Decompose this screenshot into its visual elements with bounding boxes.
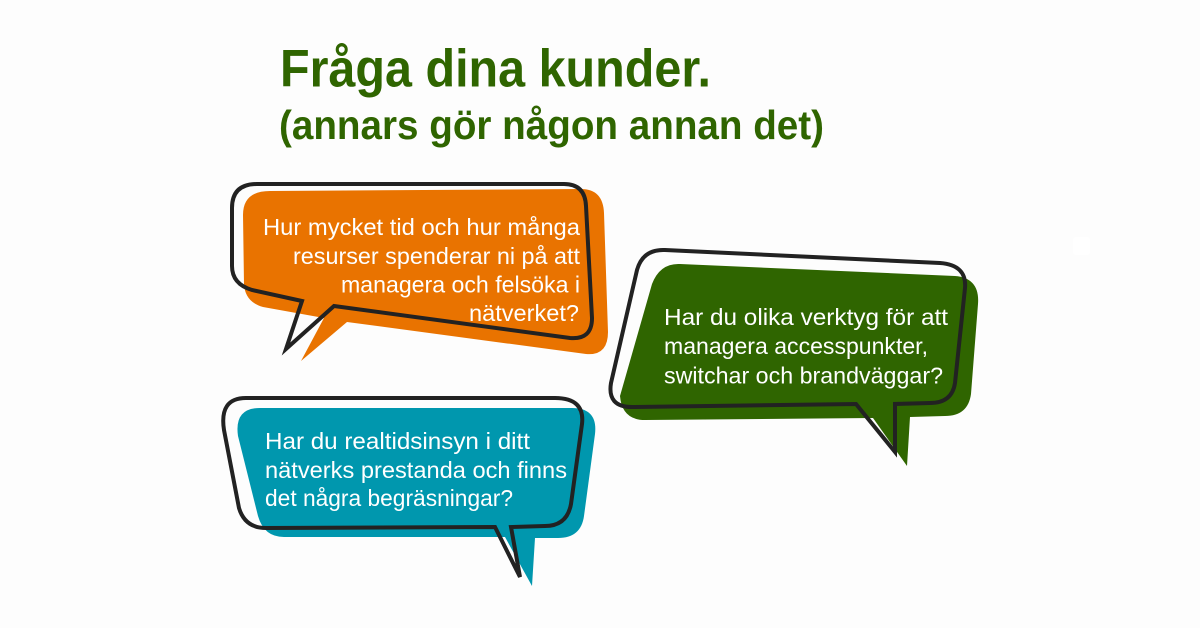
title <box>279 40 824 148</box>
speech bubble: teal question <box>223 398 595 586</box>
speech bubble: green question: Har du olika verktyg för att <box>664 304 948 330</box>
decorative white speck <box>1073 237 1090 255</box>
speech bubble: green question: switchar och brandväggar? <box>664 362 943 388</box>
speech bubble: orange question: nätverket? <box>469 300 579 326</box>
speech bubble: orange question: Hur mycket tid och hur många <box>263 214 581 240</box>
speech bubble: teal question: Har du realtidsinsyn i ditt <box>265 428 530 454</box>
speech bubble: teal question: nätverks prestanda och finns <box>265 457 567 483</box>
speech bubble: orange question: managera och felsöka i <box>341 272 580 298</box>
speech bubble: teal question: det några begräsningar? <box>265 485 513 511</box>
title: (annars gör någon annan det) <box>279 102 824 148</box>
title: Fråga dina kunder. <box>280 40 711 98</box>
speech bubble: orange question: resurser spenderar ni på att <box>293 243 580 269</box>
speech bubble: green question: managera accesspunkter, <box>664 333 928 359</box>
speech bubble: green question <box>610 250 978 466</box>
speech bubble: orange question <box>232 184 608 361</box>
